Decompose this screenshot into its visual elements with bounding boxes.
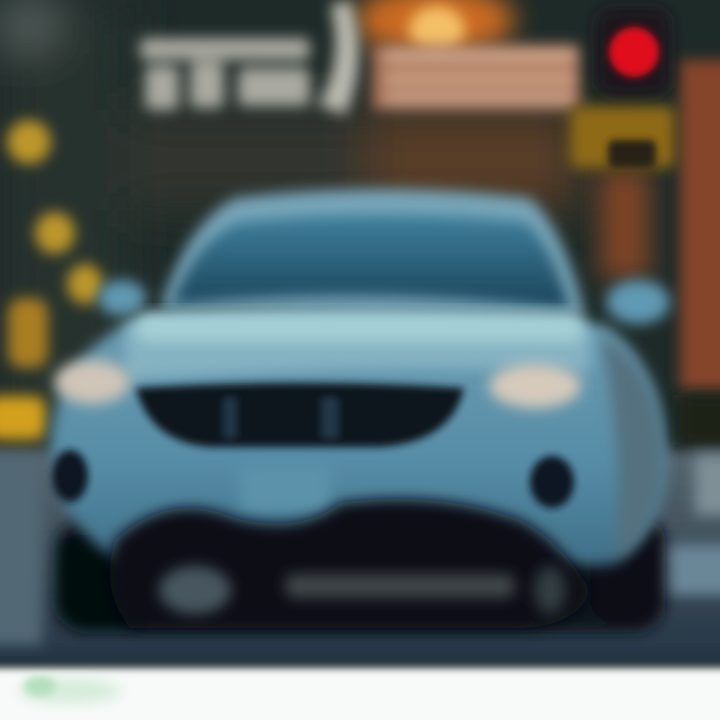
glowing lamp and awning: [355, 0, 515, 56]
blurred sign lettering, right: [372, 44, 580, 110]
icon: traffic light: [570, 8, 675, 168]
car: fog lamps: [52, 450, 574, 508]
logo smudge: [18, 678, 122, 704]
left pavement: [0, 455, 42, 645]
blurred sign lettering, left: [140, 0, 359, 115]
car: roof and cabin: [160, 189, 585, 315]
car: side mirrors: [98, 280, 670, 324]
car: wheels and shadow: [55, 520, 665, 632]
car: windshield: [172, 215, 570, 310]
car: [50, 189, 670, 632]
right side dark foliage and pavement: [670, 395, 720, 595]
car: headlights: [54, 360, 581, 408]
car: license plate area: [240, 465, 330, 511]
car: lower bumper: [110, 499, 590, 628]
car: grille: [136, 383, 464, 447]
white footer strip: [0, 668, 720, 720]
car: hood: [125, 315, 590, 380]
car: body: [50, 315, 665, 565]
car: right side panel shading: [600, 335, 665, 560]
yellow bokeh lights: [0, 120, 103, 440]
